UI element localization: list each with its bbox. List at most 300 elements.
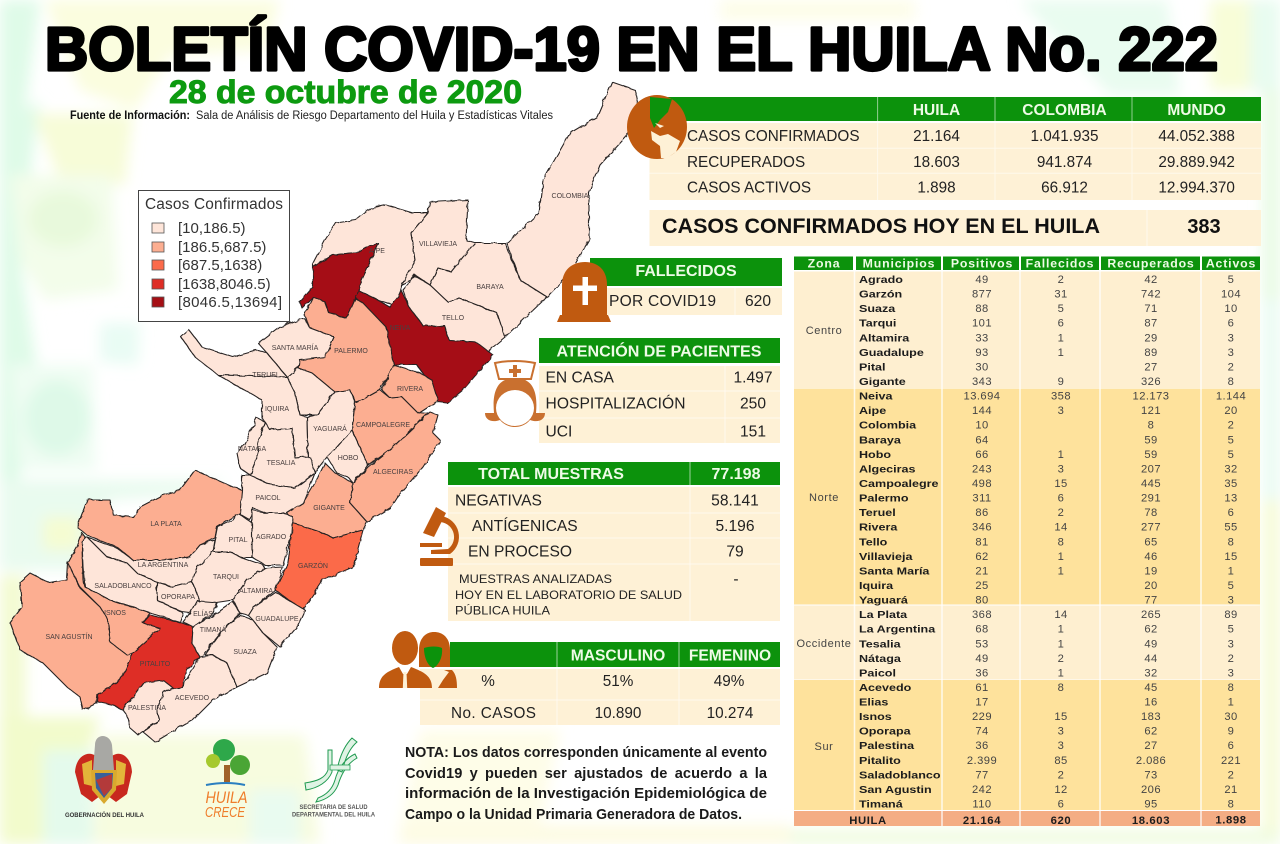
panel: total muestras: 5.196 [715, 518, 755, 535]
panel: comparison Huila Colombia Mundo [650, 97, 1261, 200]
map municipality labels: TIMANÁ [200, 625, 227, 634]
municipality: Altamira [233, 567, 283, 615]
map legend [138, 190, 290, 322]
table values: 55 [1224, 522, 1238, 534]
map legend: [687.5,1638) [178, 257, 262, 274]
table values: 73 [1144, 769, 1158, 781]
table values: 95 [1144, 798, 1158, 810]
map municipality labels: LA ARGENTINA [138, 562, 189, 569]
municipality names: Elias [859, 697, 888, 708]
table values: 6 [1228, 507, 1234, 519]
table values: 445 [1141, 478, 1161, 490]
table values: 2 [1228, 361, 1234, 373]
municipality names [859, 275, 941, 810]
municipality names: Pital [859, 362, 886, 373]
map municipality labels: PAICOL [255, 495, 281, 502]
panel: atención de pacientes: 1.497 [733, 370, 773, 386]
table values: 144 [972, 405, 992, 417]
panel: comparison Huila Colombia Mundo: 1.898 [917, 180, 956, 196]
municipality names: La Plata [859, 610, 908, 621]
municipality: Isnos [68, 533, 160, 655]
map municipality labels: RIVERA [397, 386, 423, 393]
panel: comparison Huila Colombia Mundo: 66.912 [1041, 180, 1088, 196]
logo: Huila Crece: HUILA [206, 788, 248, 807]
table values: 8 [1228, 798, 1234, 810]
municipality: Iquira [218, 375, 308, 458]
table values: 86 [975, 507, 989, 519]
panel: total muestras: TOTAL MUESTRAS [478, 466, 624, 483]
municipality: San Agustín [10, 563, 133, 710]
table header: Municipios [863, 256, 935, 270]
municipality names: Isnos [859, 712, 892, 723]
table values: 8 [1058, 536, 1064, 548]
municipality names: Yaguará [859, 595, 908, 606]
table values: 3 [1058, 740, 1064, 752]
municipality names: Tello [859, 537, 887, 548]
map municipality labels: ACEVEDO [175, 695, 210, 702]
table values: 29 [1144, 332, 1158, 344]
municipality names: Palestina [859, 741, 915, 752]
panel: comparison Huila Colombia Mundo: MUNDO [1167, 102, 1226, 119]
table values: 358 [1051, 391, 1071, 403]
table values: 77 [1144, 594, 1158, 606]
table values: 498 [972, 478, 992, 490]
municipality: Tarqui [192, 552, 265, 603]
table values: 206 [1141, 784, 1161, 796]
zone labels [797, 325, 851, 753]
table values: 59 [1144, 449, 1158, 461]
table values: 104 [1221, 289, 1241, 301]
table values: 10 [1224, 303, 1238, 315]
municipality: Nátaga [237, 418, 265, 475]
panel: comparison Huila Colombia Mundo: 18.603 [913, 154, 960, 171]
table values: 32 [1224, 463, 1238, 475]
table values: 62 [1144, 624, 1158, 636]
municipality names: Villavieja [859, 552, 913, 562]
table values: 6 [1228, 740, 1234, 752]
panel: sexo masculino femenino [420, 642, 780, 725]
municipality names: Acevedo [859, 683, 911, 694]
table values: 9 [1228, 726, 1234, 738]
panel: comparison Huila Colombia Mundo: RECUPERADOS [687, 154, 805, 171]
panel: total muestras: HOY EN EL LABORATORIO DE SALUD [455, 588, 682, 602]
map municipality labels: PALESTINA [128, 705, 166, 712]
table values: 81 [975, 536, 989, 548]
panel: total muestras: NEGATIVAS [455, 492, 542, 510]
map municipality labels: YAGUARÁ [313, 424, 347, 433]
table values: 49 [1144, 638, 1158, 650]
municipality: Palermo [298, 297, 394, 402]
panel: atención de pacientes: 151 [740, 424, 766, 440]
table values: 8 [1058, 682, 1064, 694]
table values: 53 [975, 638, 989, 650]
table values: 110 [972, 798, 992, 810]
source line: Sala de Análisis de Riesgo Departamento del Huila y Estadísticas Vitales [196, 110, 553, 122]
table values: 8 [1228, 682, 1234, 694]
table values: 74 [975, 726, 989, 738]
icon: globe [627, 95, 687, 159]
table values: 3 [1228, 332, 1234, 344]
panel: comparison Huila Colombia Mundo: 44.052.388 [1158, 128, 1235, 145]
table values: 8 [1228, 376, 1234, 388]
municipality names: La Argentina [859, 625, 936, 635]
logo: Secretaría de Salud: SECRETARIA DE SALUD [300, 804, 368, 811]
table values: 65 [1144, 536, 1158, 548]
table header: Activos [1206, 256, 1256, 270]
table values: 15 [1054, 711, 1068, 723]
table values: 2.399 [967, 755, 997, 767]
municipality: Santa María [258, 318, 334, 377]
table values: 87 [1144, 318, 1158, 330]
panel: total muestras: PÚBLICA HUILA [455, 602, 550, 618]
municipality names: Timaná [859, 799, 903, 810]
table values: 66 [975, 449, 989, 461]
table values: 121 [1141, 405, 1161, 417]
municipality: Aipe dark [300, 243, 378, 318]
table values: 8 [1148, 420, 1154, 432]
table values: 5 [1228, 580, 1234, 592]
table values: 346 [972, 522, 992, 534]
municipality names: Rivera [859, 523, 898, 533]
table values: 14 [1054, 522, 1068, 534]
map municipality labels: OPORAPA [161, 594, 195, 601]
table values: 243 [972, 463, 992, 475]
municipality: Teruel south [287, 368, 335, 415]
map municipality labels: NEIVA [390, 325, 411, 332]
table values: 6 [1228, 318, 1234, 330]
table values: 221 [1221, 755, 1241, 767]
municipality: Suaza [205, 615, 277, 687]
panel: total muestras: ANTÍGENICAS [472, 516, 578, 535]
table values: 2 [1228, 420, 1234, 432]
map municipality labels: LA PLATA [150, 521, 182, 528]
table values: 12.173 [1133, 391, 1169, 403]
table values [964, 274, 1246, 810]
municipality: Rivera [382, 365, 438, 413]
table values: 15 [1054, 478, 1068, 490]
panel: casos confirmados hoy: CASOS CONFIRMADOS HOY EN EL HUILA [662, 214, 1100, 238]
map municipality labels: PITALITO [140, 661, 171, 668]
table header: Fallecidos [1026, 256, 1094, 270]
municipality names: Garzón [859, 290, 902, 300]
municipality names: Tesalia [859, 639, 901, 650]
table header: Recuperados [1107, 256, 1195, 270]
map municipality labels: SUAZA [233, 649, 257, 656]
panel: comparison Huila Colombia Mundo: 12.994.370 [1158, 180, 1235, 196]
table values: 326 [1141, 376, 1161, 388]
panel: fallecidos: FALLECIDOS [635, 263, 737, 280]
panel: sexo masculino femenino: 10.890 [595, 705, 641, 722]
table values: 30 [1224, 711, 1238, 723]
table values: 88 [975, 303, 989, 315]
table values: 265 [1141, 609, 1161, 621]
municipality: Gigante [287, 463, 367, 538]
table values: 80 [975, 594, 989, 606]
table total row: 1.898 [1215, 814, 1247, 826]
date subtitle: 28 de octubre de 2020 [169, 74, 522, 110]
table values: 1 [1228, 696, 1234, 708]
table values: 62 [1144, 726, 1158, 738]
table values: 343 [972, 376, 992, 388]
panel: comparison Huila Colombia Mundo: 941.874 [1037, 154, 1093, 171]
zone backgrounds [794, 271, 1260, 826]
municipality names: San Agustin [859, 785, 932, 796]
municipality: Guadalupe [248, 592, 305, 647]
municipality names: Guadalupe [859, 348, 924, 359]
table values: 1 [1058, 667, 1064, 679]
table values: 1 [1228, 565, 1234, 577]
map municipality labels: SALADOBLANCO [94, 583, 152, 590]
map municipality labels: GIGANTE [313, 505, 345, 512]
logo: Huila Crece [205, 739, 250, 821]
panel: total muestras: 58.141 [711, 492, 759, 510]
municipality names: Pitalito [859, 756, 901, 766]
map municipality labels: CAMPOALEGRE [356, 422, 410, 429]
panel: atención de pacientes: HOSPITALIZACIÓN [546, 394, 686, 412]
table values: 12 [1054, 784, 1068, 796]
icon: microscope [420, 507, 459, 566]
municipality names: Palermo [859, 494, 909, 504]
table values: 1 [1058, 624, 1064, 636]
table values: 291 [1141, 493, 1161, 505]
panel: comparison Huila Colombia Mundo: CASOS CONFIRMADOS [687, 128, 860, 145]
map municipality labels: SAN AGUSTÍN [45, 632, 93, 641]
table values: 1 [1058, 551, 1064, 563]
table total row: HUILA [849, 815, 887, 827]
map municipality labels: GUADALUPE [255, 616, 299, 623]
table values: 32 [1144, 667, 1158, 679]
panel: comparison Huila Colombia Mundo: COLOMBIA [1022, 102, 1107, 119]
map legend: [8046.5,13694] [178, 294, 282, 311]
table values: 229 [972, 711, 992, 723]
municipality: Teruel [181, 330, 287, 377]
table values: 5 [1228, 274, 1234, 286]
source line: Fuente de Información: [70, 110, 190, 122]
table values: 31 [1054, 289, 1068, 301]
table values: 742 [1141, 289, 1161, 301]
municipality: Elías [183, 600, 217, 627]
map municipality labels: HOBO [338, 455, 359, 462]
table values: 61 [975, 682, 989, 694]
municipality names: Colombia [859, 421, 917, 431]
table values: 1 [1058, 638, 1064, 650]
municipality names: Baraya [859, 435, 902, 446]
table values: 10 [975, 420, 989, 432]
map municipality labels: VILLAVIEJA [419, 241, 457, 248]
municipality names: Neiva [859, 392, 893, 402]
table values: 17 [975, 696, 989, 708]
table values: 20 [1224, 405, 1238, 417]
municipality: Neiva [355, 290, 493, 403]
table values: 368 [972, 609, 992, 621]
logo: Gobernación del Huila: GOBERNACIÓN DEL HUILA [65, 810, 144, 819]
municipality: Agrado [252, 510, 293, 565]
panel: sexo masculino femenino: 10.274 [707, 705, 754, 722]
map municipality labels: COLOMBIA [552, 193, 589, 200]
icon: tombstone [557, 262, 611, 322]
municipality names: Santa María [859, 566, 930, 577]
map municipality labels: NÁTAGA [238, 444, 266, 453]
municipality: Pital [213, 513, 252, 557]
note text [405, 745, 768, 823]
table values: 5 [1058, 303, 1064, 315]
table values: 35 [1224, 478, 1238, 490]
panel: comparison Huila Colombia Mundo: 1.041.935 [1030, 128, 1099, 145]
table values: 21 [1224, 784, 1238, 796]
table values: 8 [1228, 536, 1234, 548]
logo: Secretaría de Salud [292, 738, 375, 818]
table values: 13.694 [964, 391, 1000, 403]
table values: 1 [1058, 449, 1064, 461]
table values: 207 [1141, 463, 1161, 475]
table values: 2 [1228, 769, 1234, 781]
choropleth map of Huila [10, 82, 646, 742]
panel: sexo masculino femenino: % [481, 673, 495, 690]
panel: total muestras: EN PROCESO [468, 544, 572, 560]
municipality: Villavieja [401, 200, 476, 285]
panel: comparison Huila Colombia Mundo: 21.164 [913, 128, 960, 145]
map municipality labels: AGRADO [256, 534, 287, 541]
table values: 68 [975, 624, 989, 636]
zone labels: Norte [809, 492, 839, 504]
table values: 64 [975, 434, 989, 446]
table values: 89 [1224, 609, 1238, 621]
map municipality labels: BARAYA [476, 284, 504, 291]
table total row: 21.164 [963, 815, 1001, 827]
map municipality labels: PITAL [229, 537, 248, 544]
table values: 44 [1144, 653, 1158, 665]
panel: municipal table [794, 256, 1260, 827]
municipality: Algeciras [350, 412, 440, 522]
table values: 93 [975, 347, 989, 359]
table values: 5 [1228, 434, 1234, 446]
table values: 277 [1141, 522, 1161, 534]
zone labels: Occidente [797, 638, 851, 650]
table values: 877 [972, 289, 992, 301]
map legend: Casos Confirmados [145, 196, 283, 213]
panel: atención de pacientes: 250 [740, 396, 766, 412]
table values: 36 [975, 667, 989, 679]
table values: 3 [1228, 594, 1234, 606]
table values: 3 [1228, 347, 1234, 359]
panel: total muestras: 77.198 [712, 466, 761, 483]
table values: 14 [1054, 609, 1068, 621]
municipality: Garzón [275, 523, 363, 610]
municipality names: Nátaga [859, 654, 902, 664]
map municipality labels: ALGECIRAS [373, 469, 413, 476]
map municipality labels: TELLO [442, 315, 465, 322]
municipality: Yaguará [307, 390, 355, 472]
table values: 3 [1058, 405, 1064, 417]
table values: 3 [1228, 667, 1234, 679]
panel: casos confirmados hoy [650, 210, 1261, 246]
logo: Secretaría de Salud: DEPARTAMENTAL DEL HUILA [292, 812, 375, 818]
logo: Gobernación del Huila [65, 736, 144, 819]
table header: Zona [808, 256, 840, 270]
municipality names: Iquira [859, 581, 894, 592]
table total row: 620 [1051, 815, 1071, 827]
panel: sexo masculino femenino: 49% [714, 673, 745, 690]
municipality: Paicol [238, 473, 315, 522]
table values: 27 [1144, 740, 1158, 752]
municipality names: Campoalegre [859, 479, 938, 490]
municipality names: Gigante [859, 377, 906, 388]
municipality names: Agrado [859, 275, 903, 286]
table values: 71 [1144, 303, 1158, 315]
table values: 59 [1144, 434, 1158, 446]
table total row [849, 814, 1247, 827]
table values: 2 [1228, 653, 1234, 665]
table values: 311 [972, 493, 992, 505]
municipality: Saladoblanco [82, 537, 183, 622]
table values: 242 [972, 784, 992, 796]
map municipality labels: ELÍAS [193, 609, 213, 618]
panel: sexo masculino femenino: MASCULINO [571, 648, 665, 664]
map municipality labels: SANTA MARÍA [272, 343, 319, 352]
municipality: Tesalia [250, 422, 315, 488]
map legend: [186.5,687.5) [178, 239, 266, 256]
map legend: [10,186.5) [178, 220, 246, 237]
table header: Positivos [951, 256, 1013, 270]
municipality names: Teruel [859, 508, 896, 519]
municipality: La Argentina [87, 537, 215, 587]
table values: 78 [1144, 507, 1158, 519]
table values: 77 [975, 769, 989, 781]
map municipality labels: TERUEL [252, 372, 280, 379]
municipality: Acevedo [143, 655, 237, 742]
table values: 1 [1058, 332, 1064, 344]
municipality names: Altamira [859, 333, 910, 344]
table values: 42 [1144, 274, 1158, 286]
table values: 25 [975, 580, 989, 592]
table values: 30 [975, 361, 989, 373]
table values: 21 [975, 565, 989, 577]
note text: información de la Investigación Epidemiológica de [405, 786, 767, 802]
panel: fallecidos: 620 [745, 293, 771, 310]
table values: 3 [1228, 638, 1234, 650]
panel: total muestras: MUESTRAS ANALIZADAS [459, 572, 612, 586]
map municipality labels [45, 193, 589, 712]
panel: comparison Huila Colombia Mundo: CASOS ACTIVOS [687, 180, 811, 196]
municipality: Campoalegre [352, 390, 428, 465]
table values: 36 [975, 740, 989, 752]
municipality: Timaná [192, 602, 240, 657]
table values: 5 [1228, 624, 1234, 636]
table values: 3 [1058, 463, 1064, 475]
municipality: Colombia [507, 82, 646, 297]
map municipality labels: TESALIA [267, 460, 296, 467]
panel: comparison Huila Colombia Mundo: HUILA [913, 102, 960, 119]
table values: 9 [1058, 376, 1064, 388]
table values: 49 [975, 653, 989, 665]
table values: 49 [975, 274, 989, 286]
table values: 85 [1054, 755, 1068, 767]
table values: 5 [1228, 449, 1234, 461]
table values: 1.144 [1216, 391, 1246, 403]
panel: sexo masculino femenino: No. CASOS [451, 705, 536, 722]
municipality names: Algeciras [859, 464, 915, 475]
zone labels: Sur [815, 741, 833, 753]
municipality: Oporapa [157, 582, 200, 613]
table values: 101 [972, 318, 992, 330]
table values: 16 [1144, 696, 1158, 708]
panel: sexo masculino femenino: 51% [603, 673, 634, 690]
panel: casos confirmados hoy: 383 [1187, 216, 1221, 238]
municipality: La Plata [77, 470, 242, 560]
table values: 2 [1058, 274, 1064, 286]
map municipality labels: IQUIRA [265, 406, 289, 413]
map municipality labels: AIPE [369, 248, 385, 255]
